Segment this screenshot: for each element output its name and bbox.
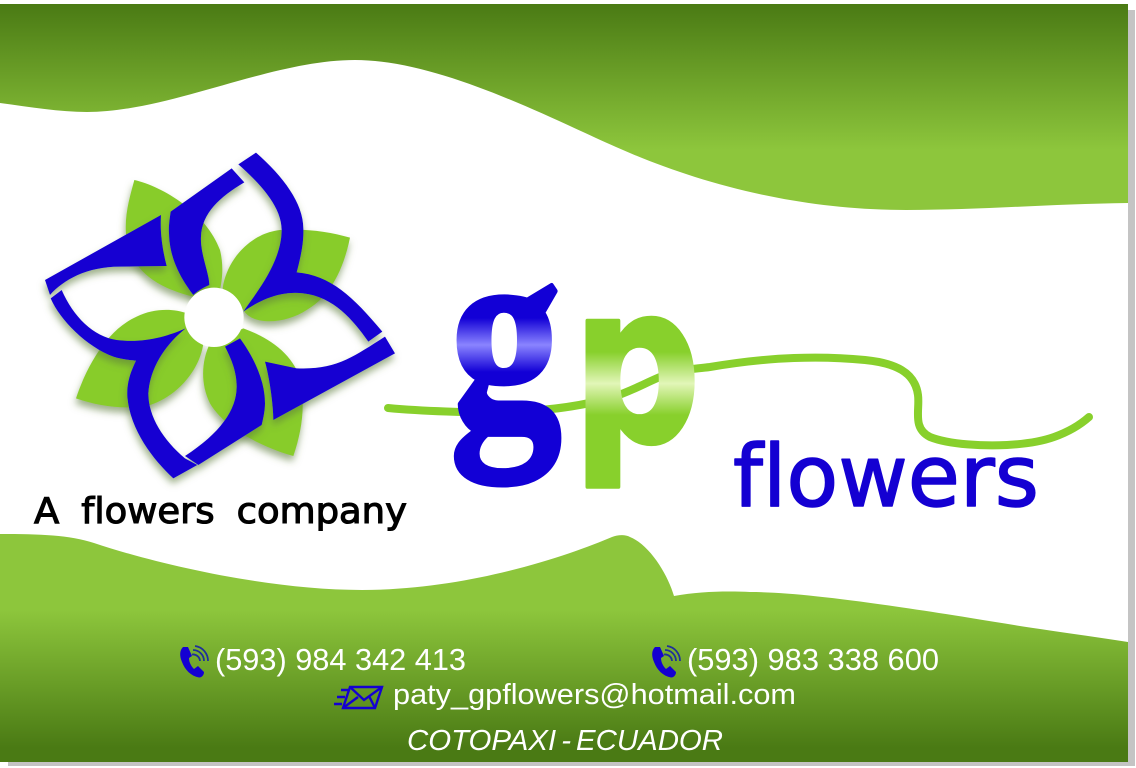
logo letter g: g [450, 182, 562, 485]
green swoosh line [388, 358, 1089, 445]
blue pinwheel petals [45, 153, 395, 478]
phone number left: (593) 984 342 413 [215, 643, 466, 677]
phone icon left [180, 646, 208, 678]
green leaves [76, 180, 350, 456]
email icon [334, 687, 382, 708]
email address: paty_gpflowers@hotmail.com [393, 679, 796, 711]
flowers wordmark: flowers [733, 427, 1039, 527]
bottom green wave band [0, 534, 1128, 762]
phone number right: (593) 983 338 600 [687, 643, 939, 677]
logo letter p: p [572, 238, 701, 493]
top green wave band [0, 4, 1128, 210]
phone icon right [652, 646, 680, 678]
location: COTOPAXI - ECUADOR [407, 725, 723, 757]
tagline: A flowers company [34, 491, 407, 532]
white flower centre [184, 288, 244, 347]
flower logo [45, 153, 395, 478]
